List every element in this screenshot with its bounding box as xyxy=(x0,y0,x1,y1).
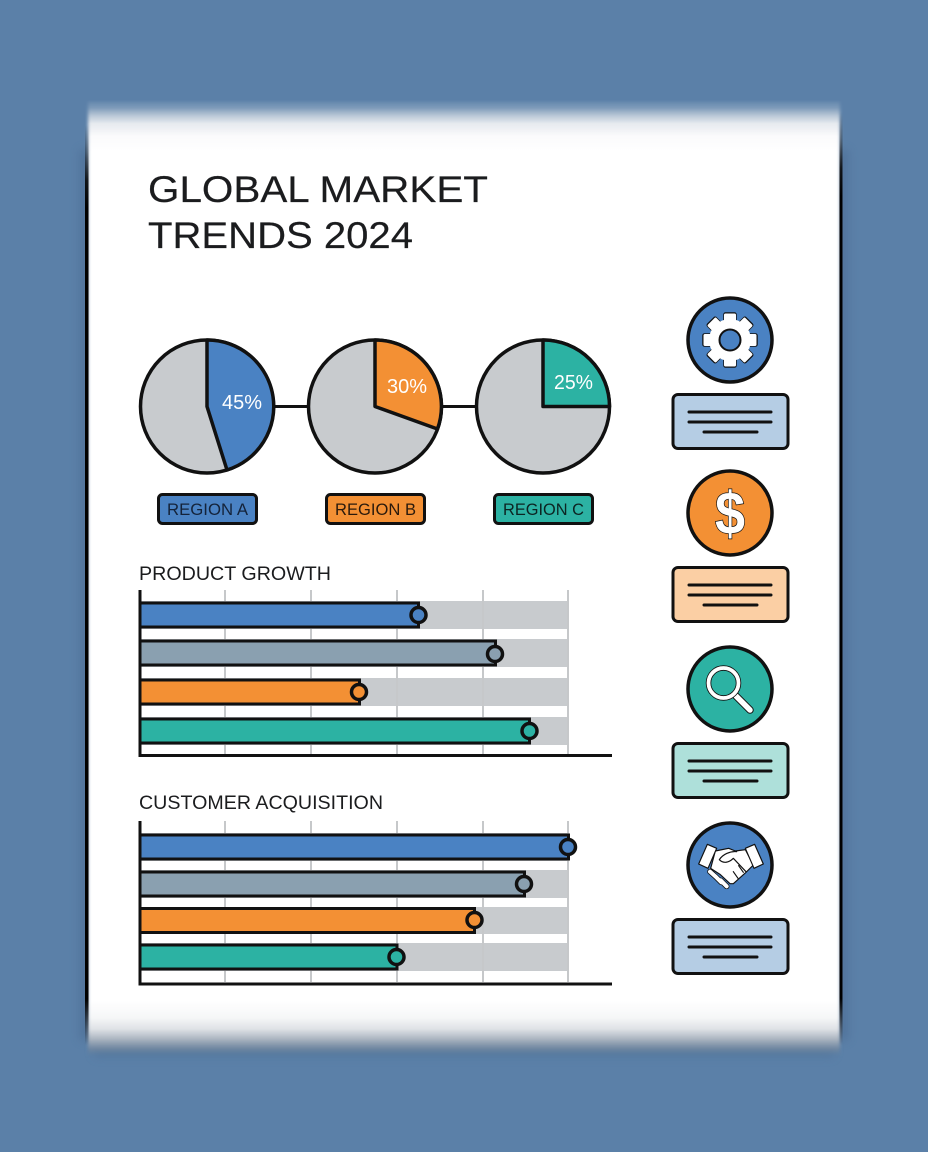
label: region B: REGION B xyxy=(335,501,416,519)
label: region C xyxy=(494,494,592,524)
title: TRENDS 2024 xyxy=(148,215,413,256)
label: region A: REGION A xyxy=(167,501,248,519)
pie chart: region A: 45% xyxy=(222,391,262,414)
card: dollar description xyxy=(673,568,788,622)
icon: handshake xyxy=(688,823,772,907)
paper xyxy=(85,100,842,1058)
title xyxy=(148,169,488,256)
title: GLOBAL MARKET xyxy=(148,169,488,210)
pie chart: region C xyxy=(476,340,610,473)
card: magnifier description xyxy=(673,744,788,798)
label: region A xyxy=(158,494,256,524)
connector lines between pies xyxy=(273,405,478,408)
icon: dollar xyxy=(688,471,772,555)
label: region B xyxy=(326,494,424,524)
heading: customer acquisition: CUSTOMER ACQUISITION xyxy=(139,793,383,814)
bar chart: product growth xyxy=(140,590,612,756)
paper shadow xyxy=(80,150,848,1056)
card: handshake description xyxy=(673,920,788,974)
pie chart: region B: 30% xyxy=(387,375,427,398)
icon: dollar: $ xyxy=(715,480,745,547)
pie chart: region C: 25% xyxy=(554,371,593,394)
pie chart: region A xyxy=(140,340,274,473)
card: gear description xyxy=(673,394,788,448)
bar chart: customer acquisition xyxy=(140,821,612,984)
heading: product growth: PRODUCT GROWTH xyxy=(139,564,331,585)
icon: gear xyxy=(688,298,772,382)
label: region C: REGION C xyxy=(503,501,584,519)
pie chart: region B xyxy=(308,340,442,473)
icon: magnifier xyxy=(688,647,772,731)
